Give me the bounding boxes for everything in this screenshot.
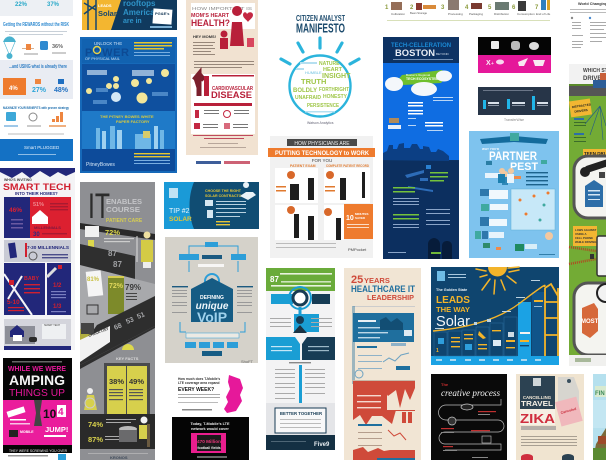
- panel: IT enables course: COURSE: [106, 205, 140, 214]
- panel: smart tech in homes: BABY: [24, 276, 39, 282]
- panel: t-mobile lte: Today, T-Mobile's LTE: [190, 422, 230, 426]
- panel: IT enables course: KEY FACTS: [116, 356, 139, 361]
- panel: IT enables course: 49%: [129, 377, 144, 386]
- panel: mom's heart health: HOW IMPORTANT IS: [192, 6, 252, 11]
- panel: mom's heart health: MOM'S HEART: [191, 13, 230, 19]
- panel: mom's heart health: [186, 0, 258, 164]
- panel: mom's heart health: HEY MOMS!: [193, 34, 216, 39]
- panel: golden state leads solar: LEADS: [436, 295, 470, 306]
- panel: amping things up: 10: [43, 407, 57, 421]
- panel: solar tip 2: [164, 182, 259, 229]
- icon: parachute: [3, 36, 16, 59]
- panel: smart tech in homes: 51%: [33, 202, 44, 208]
- panel: boston tech-celleration: TECH-CELLERATION: [391, 43, 451, 49]
- panel: IT enables course: 74%: [88, 420, 103, 429]
- panel: rewards infographic: MAXIMIZE YOUR BENEFITS with proven strategy: [3, 106, 70, 110]
- panel: citizen analyst manifesto: TRUTH: [301, 77, 326, 86]
- panel: golden gate solar strip: PG&E's: [155, 11, 170, 16]
- panel: zika cancelling travel: Canceled: [560, 407, 577, 415]
- panel: golden state leads solar: 1: [436, 348, 439, 354]
- icon: sun: [476, 267, 519, 294]
- panel: IT enables course: 87%: [88, 435, 103, 444]
- panel: physicians putting technology to work: FOR YOU: [312, 158, 332, 163]
- panel: which states drive: WHILE DRIVING: [575, 240, 596, 244]
- panel: physicians putting technology to work: HOW PHYSICIANS ARE: [294, 141, 350, 147]
- panel: rewards infographic: Getting the REWARDS without the RISK: [3, 22, 69, 28]
- panel: defining unique voip: ShoFT: [241, 359, 254, 364]
- panel: rewards infographic: 22%: [15, 2, 28, 8]
- panel: partner with pest: PEST: [510, 161, 538, 173]
- panel: solar tip 2: TIP #2: [169, 208, 190, 215]
- panel: black and pink icons: X: [486, 60, 491, 67]
- panel: IT enables course: PATIENT CARE: [106, 218, 143, 224]
- panel: IT enables course: 72%: [109, 283, 124, 290]
- panel: smart tech in homes: 1/2: [53, 283, 62, 289]
- panel: process steps strip: 1: [385, 5, 389, 11]
- panel: golden gate solar strip: America: [123, 8, 155, 17]
- panel: IT enables course: 53: [125, 316, 135, 326]
- panel: boston tech-celleration: [383, 37, 459, 259]
- panel: citizen analyst manifesto: PERSISTENCE: [307, 103, 339, 109]
- panel: IT enables course: [80, 182, 155, 460]
- panel: physicians putting technology to work: PATIENT EXAM: [290, 164, 316, 168]
- panel: golden gate solar strip: are in: [123, 18, 142, 25]
- panel: smart tech in homes: SMART TECH: [3, 182, 71, 192]
- panel: defining unique voip: VoIP: [197, 309, 227, 325]
- cloud callouts: TECH ECOSYSTEM: [406, 77, 439, 81]
- panel: IT enables course: CHECK LIST: [88, 327, 110, 338]
- panel: IT enables course: 79%: [125, 283, 141, 292]
- panel: crm contact center: Five9: [314, 442, 330, 448]
- panel: which states drive: [569, 64, 606, 366]
- panel: IT enables course: ENABLES: [106, 197, 142, 206]
- panel: citizen analyst manifesto: HEART: [323, 67, 343, 73]
- panel: process steps strip: 4: [465, 5, 469, 11]
- panel: process steps strip: Bean Storage: [410, 11, 428, 15]
- icon: sun rays: [281, 38, 359, 64]
- panel: solar tip 2: SOLAR CONTRACTOR: [205, 194, 244, 198]
- cloud callouts: [385, 70, 452, 96]
- panel: citizen analyst manifesto: FORTHRIGHT: [319, 87, 349, 93]
- panel: citizen analyst manifesto: HUMBLE: [305, 70, 322, 75]
- panel: t-mobile lte: How much does T-Mobile's: [178, 377, 220, 381]
- panel: power of physical mail: [80, 37, 177, 173]
- panel: defining unique voip: DEFINING: [200, 295, 224, 301]
- panel: rewards infographic: 27%: [32, 87, 47, 94]
- panel: crm contact center: 87: [270, 275, 279, 284]
- panel: IT enables course: IT: [88, 187, 110, 226]
- panel: smart tech in homes: 46%: [9, 207, 22, 214]
- panel: golden state leads solar: The Golden State: [436, 288, 467, 292]
- panel: golden state leads solar: THE WAY: [436, 305, 470, 314]
- panel: which states drive: TEEN DRI: [584, 151, 605, 156]
- panel: citizen analyst manifesto: UNAFRAID: [295, 95, 321, 101]
- panel: golden gate solar strip: LEADS: [98, 3, 112, 8]
- panel: smart tech in homes: 1/3: [53, 304, 62, 310]
- panel: green travel poster: FIN: [595, 391, 605, 397]
- boston skyline: [383, 143, 449, 161]
- panel: golden state leads solar: Solar: [436, 313, 470, 330]
- panel: rewards infographic: 4%: [9, 86, 18, 92]
- panel: IT enables course: KRONOS: [110, 455, 128, 460]
- panel: which states drive: MOST: [581, 319, 599, 325]
- panel: process steps strip: Consumption: [517, 12, 535, 16]
- panel: which states drive: DISTRACTED: [572, 102, 592, 109]
- panel: physicians putting technology to work: 10: [346, 215, 354, 222]
- panel: crm contact center: BETTER TOGETHER: [280, 411, 323, 416]
- panel: citizen analyst manifesto: BOLDLY: [293, 88, 317, 94]
- panel: t-mobile lte: football fields: [197, 446, 221, 450]
- panel: power of physical mail: PitneyBowes: [86, 162, 115, 168]
- panel: defining unique voip: [165, 237, 258, 364]
- panel: 25 years of healthcare it: YEARS: [364, 276, 390, 285]
- panel: 25 years of healthcare it: [344, 268, 421, 460]
- panel: solar tip 2: CHOOSE THE RIGHT: [205, 189, 242, 193]
- panel: amping things up: THINGS UP: [9, 387, 65, 399]
- panel: 25 years of healthcare it: LEADERSHIP: [367, 293, 414, 302]
- panel: t-mobile lte: EVERY WEEK?: [178, 387, 214, 393]
- panel: citizen analyst manifesto: MANIFESTO: [296, 20, 345, 36]
- panel: power of physical mail: PAPER FACTORY: [116, 119, 150, 124]
- panel: IT enables course: 51: [136, 311, 146, 321]
- panel: partner with pest: PARTNER: [489, 149, 537, 163]
- panel: process steps strip: Packaging: [469, 12, 483, 16]
- panel: citizen analyst manifesto: NATURE: [319, 61, 340, 67]
- panel: mom's heart health: CARDIOVASCULAR: [212, 86, 253, 92]
- panel: 25 years of healthcare it: 25: [351, 274, 363, 286]
- panel: power of physical mail: POWER: [85, 47, 130, 59]
- panel: physicians putting technology to work: PUTTING TECHNOLOGY to WORK: [275, 151, 370, 157]
- panel: rewards infographic: Smart PLUGGED: [24, 145, 60, 150]
- panel: which states drive: CELL PHONE: [575, 236, 593, 240]
- golden gate tower: [545, 284, 558, 356]
- panel: smart tech in homes: 7-30 MILLENNIALS: [27, 245, 69, 250]
- panel: process steps strip: Cultivation: [391, 12, 405, 16]
- panel: world changing text: [570, 2, 606, 48]
- panel: process steps strip: 6: [512, 5, 516, 11]
- panel: amping things up: [3, 358, 72, 460]
- panel: citizen analyst manifesto: INSIGHT: [322, 73, 351, 80]
- panel: rewards infographic: ...and USING what is already there: [9, 64, 67, 70]
- panel: amping things up: AMPING: [9, 372, 65, 388]
- panel: which states drive: LAWS AGAINST: [575, 228, 597, 232]
- panel: which states drive: DRIVE: [583, 76, 601, 82]
- panel: golden gate solar strip: Solar: [98, 9, 117, 18]
- panel: process steps strip: Distribution: [494, 12, 509, 16]
- panel: process steps strip: End of Life: [536, 12, 551, 16]
- panel: power of physical mail: THE PITNEY BOWES WHITE: [100, 114, 154, 119]
- panel: green travel poster: [593, 374, 606, 460]
- panel: process steps strip: 5: [488, 5, 492, 11]
- panel: amping things up: WHILE WE WERE: [8, 364, 66, 373]
- panel: partner with pest: WHY YOU'D: [482, 147, 500, 151]
- panel: defining unique voip: unique: [196, 301, 229, 312]
- panel: rewards infographic: 37%: [47, 2, 60, 8]
- panel: citizen analyst manifesto: [281, 13, 359, 125]
- panel: citizen analyst manifesto: Watson Analytics: [307, 121, 334, 125]
- panel: zika cancelling travel: [516, 374, 584, 460]
- panel: t-mobile lte: network would cover: [191, 427, 229, 431]
- panel: physicians putting technology to work: MINUTES: [355, 212, 368, 216]
- panel: process steps strip: [385, 0, 551, 21]
- panel: amping things up: JUMP!: [45, 425, 68, 434]
- panel: power of physical mail: UNLOCK THE: [94, 41, 122, 46]
- panel: process steps strip: 3: [441, 5, 445, 11]
- panel: physicians putting technology to work: [268, 136, 375, 258]
- panel: rewards infographic: 36%: [52, 44, 63, 50]
- panel: process steps strip: 2: [410, 5, 414, 11]
- panel: IT enables course: 87: [113, 260, 122, 269]
- cloud callouts: Boston's Regional: [406, 73, 430, 77]
- panel: process steps strip: 7: [535, 5, 539, 11]
- panel: t-mobile lte: LTE coverage area expand: [178, 381, 220, 385]
- panel: fintech usage: [478, 87, 551, 122]
- panel: amping things up: 4: [58, 407, 64, 418]
- panel: IT enables course: 38%: [109, 377, 124, 386]
- panel: t-mobile lte: [172, 375, 249, 460]
- bars: [434, 317, 517, 356]
- panel: rewards infographic: 48%: [54, 87, 69, 94]
- panel: zika cancelling travel: ZIKA: [520, 412, 555, 426]
- panel: amping things up: MOBILE: [20, 430, 34, 434]
- panel: crm contact center: [266, 268, 335, 450]
- panel: boston tech-celleration: BOSTON: [395, 48, 435, 59]
- panel: black and pink icons: [478, 37, 551, 73]
- panel: IT enables course: 87: [108, 249, 117, 258]
- panel: 25 years of healthcare it: HEALTHCARE IT: [351, 284, 415, 294]
- icon: mother and child: [220, 6, 254, 49]
- panel: golden state leads solar: [431, 267, 559, 365]
- panel: smart tech in homes: 30: [33, 232, 40, 238]
- panel: creative process: creative process: [441, 388, 501, 398]
- panel: black and pink icons: +: [491, 61, 494, 67]
- panel: zika cancelling travel: CANCELLING: [523, 395, 552, 400]
- panel: fintech usage: TransferWise: [504, 118, 524, 122]
- panel: citizen analyst manifesto: CITIZEN ANALYST: [296, 13, 346, 23]
- panel: physicians putting technology to work: SAVED: [355, 216, 366, 220]
- panel: smart tech in homes: [0, 168, 75, 350]
- panel: mom's heart health: DISEASE: [211, 90, 252, 100]
- panel: zika cancelling travel: TRAVEL: [521, 401, 554, 408]
- panel: which states drive: USING A: [575, 232, 587, 236]
- panel: amping things up: THEY WERE SCREWING YOU OVER: [9, 449, 68, 453]
- panel: t-mobile lte: 470 Million: [197, 439, 221, 444]
- panel: solar tip 2: SOLAR: [169, 216, 192, 223]
- panel: physicians putting technology to work: COMPLETE PATIENT RECORD: [326, 164, 369, 168]
- panel: physicians putting technology to work: PMPocket: [348, 247, 367, 252]
- panel: mom's heart health: HEALTH?: [191, 18, 230, 28]
- panel: smart tech in homes: 5-10: [7, 299, 20, 306]
- panel: rewards infographic: [0, 0, 73, 161]
- panel: IT enables course: 81%: [87, 277, 100, 283]
- panel: smart tech in homes: MILLENNIALS: [34, 225, 61, 230]
- panel: IT enables course: 68: [113, 322, 123, 332]
- panel: boston tech-celleration: BEYOND: [436, 52, 450, 56]
- panel: partner with pest: [469, 131, 559, 258]
- panel: IT enables course: 72%: [105, 228, 120, 237]
- icon: new jersey map: [224, 375, 243, 413]
- panel: creative process: The: [441, 382, 449, 387]
- figure: patient with IV: [137, 232, 153, 268]
- panel: smart tech in homes: WHO'S INVITING: [4, 178, 32, 182]
- panel: process steps strip: Processing: [448, 12, 463, 16]
- panel: which states drive: DRIVERS: [574, 108, 588, 114]
- panel: power of physical mail: OF PHYSICAL MAIL: [85, 57, 120, 61]
- panel: citizen analyst manifesto: HONESTY: [323, 94, 347, 100]
- panel: creative process: [431, 374, 507, 460]
- panel: smart tech in homes: INTO THEIR HOMES?: [15, 191, 58, 196]
- panel: smart tech in homes: SMART TECH: [44, 324, 60, 327]
- panel: golden gate solar strip: [82, 0, 177, 30]
